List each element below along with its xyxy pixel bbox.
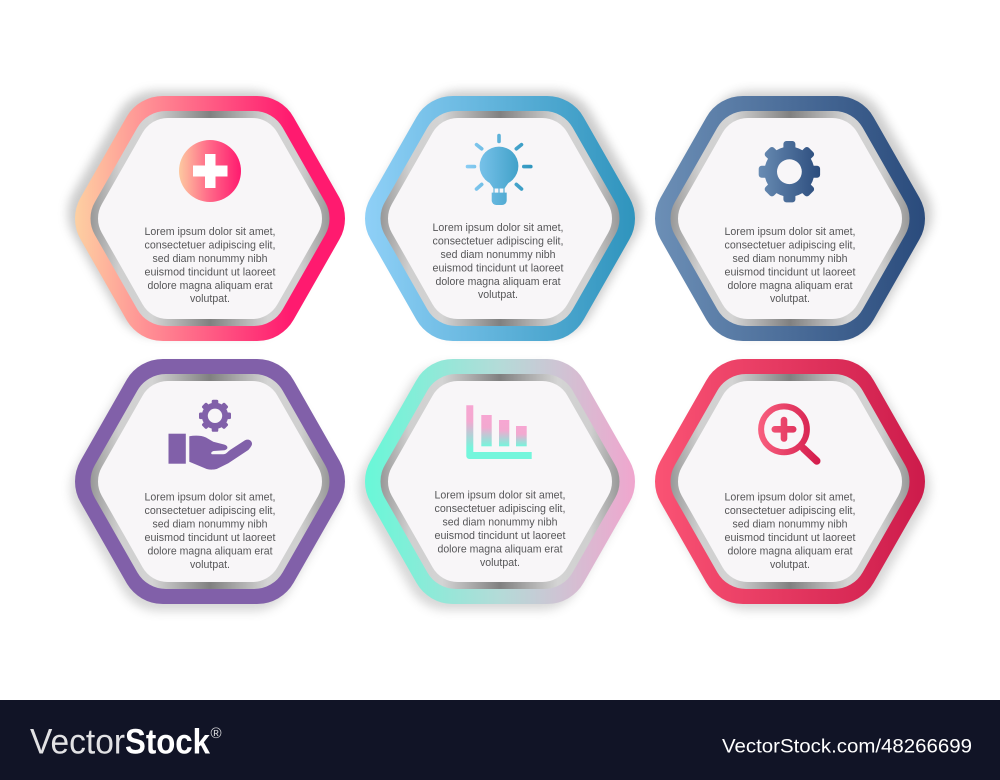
icon: bar chart [466,405,532,459]
text block 5: dolore magna aliquam erat [438,544,563,556]
text block 6: consectetuer adipiscing elit, [724,505,856,517]
icon: plus in circle [179,140,241,202]
text block 5: euismod tincidunt ut laoreet [434,530,566,542]
panel: hexagon 6 (magnifier) [697,401,888,571]
text block 6: euismod tincidunt ut laoreet [724,532,856,544]
text block 4: consectetuer adipiscing elit, [144,505,276,517]
text block 1: Lorem ipsum dolor sit amet, [144,226,276,238]
text block 4: sed diam nonummy nibh [152,518,268,530]
logo: VectorStock: ® [210,725,222,742]
text block 4: volutpat. [190,559,230,571]
panel: hexagon 1 (medical plus) [110,133,303,305]
text block 3: consectetuer adipiscing elit, [724,240,856,252]
text block 5: Lorem ipsum dolor sit amet, [434,490,566,502]
footer url: VectorStock.com/48266699 [722,736,972,758]
logo: VectorStock [30,722,222,761]
icon: hand holding gear [168,400,252,470]
text block 4: euismod tincidunt ut laoreet [144,532,276,544]
text block 2: Lorem ipsum dolor sit amet, [432,222,564,234]
text block 4 [144,492,276,571]
panel: hexagon 5 (bar chart) [401,401,593,569]
text block 4: Lorem ipsum dolor sit amet, [144,492,276,504]
panel: hexagon 4 (hand with gear) [113,400,303,571]
text block 2: volutpat. [478,289,518,301]
text block 3: euismod tincidunt ut laoreet [724,266,856,278]
text block 3: volutpat. [770,293,810,305]
text block 2 [432,222,564,301]
text block 3: dolore magna aliquam erat [728,280,853,292]
text block 3: sed diam nonummy nibh [732,253,848,265]
text block 5 [434,490,566,569]
text block 5: sed diam nonummy nibh [442,516,558,528]
text block 2: consectetuer adipiscing elit, [432,236,564,248]
text block 5: consectetuer adipiscing elit, [434,503,566,515]
text block 3 [724,226,856,305]
icon: magnifier with plus [761,406,817,461]
text block 6: dolore magna aliquam erat [728,546,853,558]
text block 1: sed diam nonummy nibh [152,253,268,265]
icon: gear [758,141,820,202]
text block 1: volutpat. [190,293,230,305]
text block 1: consectetuer adipiscing elit, [144,240,276,252]
text block 2: euismod tincidunt ut laoreet [432,262,564,274]
text block 6: sed diam nonummy nibh [732,518,848,530]
text block 1: dolore magna aliquam erat [148,280,273,292]
text block 5: volutpat. [480,557,520,569]
logo: VectorStock: Stock [125,722,210,761]
icon: light bulb [468,136,531,205]
text block 4: dolore magna aliquam erat [148,546,273,558]
text block 6: volutpat. [770,559,810,571]
text block 1 [144,226,276,305]
text block 2: dolore magna aliquam erat [436,276,561,288]
footer bar [0,700,1000,780]
text block 6: Lorem ipsum dolor sit amet, [724,492,856,504]
text block 6 [724,492,856,571]
logo: VectorStock: Vector [30,722,125,761]
text block 2: sed diam nonummy nibh [440,249,556,261]
text block 3: Lorem ipsum dolor sit amet, [724,226,856,238]
text block 1: euismod tincidunt ut laoreet [144,266,276,278]
panel: hexagon 2 (light bulb) [407,133,600,301]
panel: hexagon 3 (gear) [697,133,890,305]
